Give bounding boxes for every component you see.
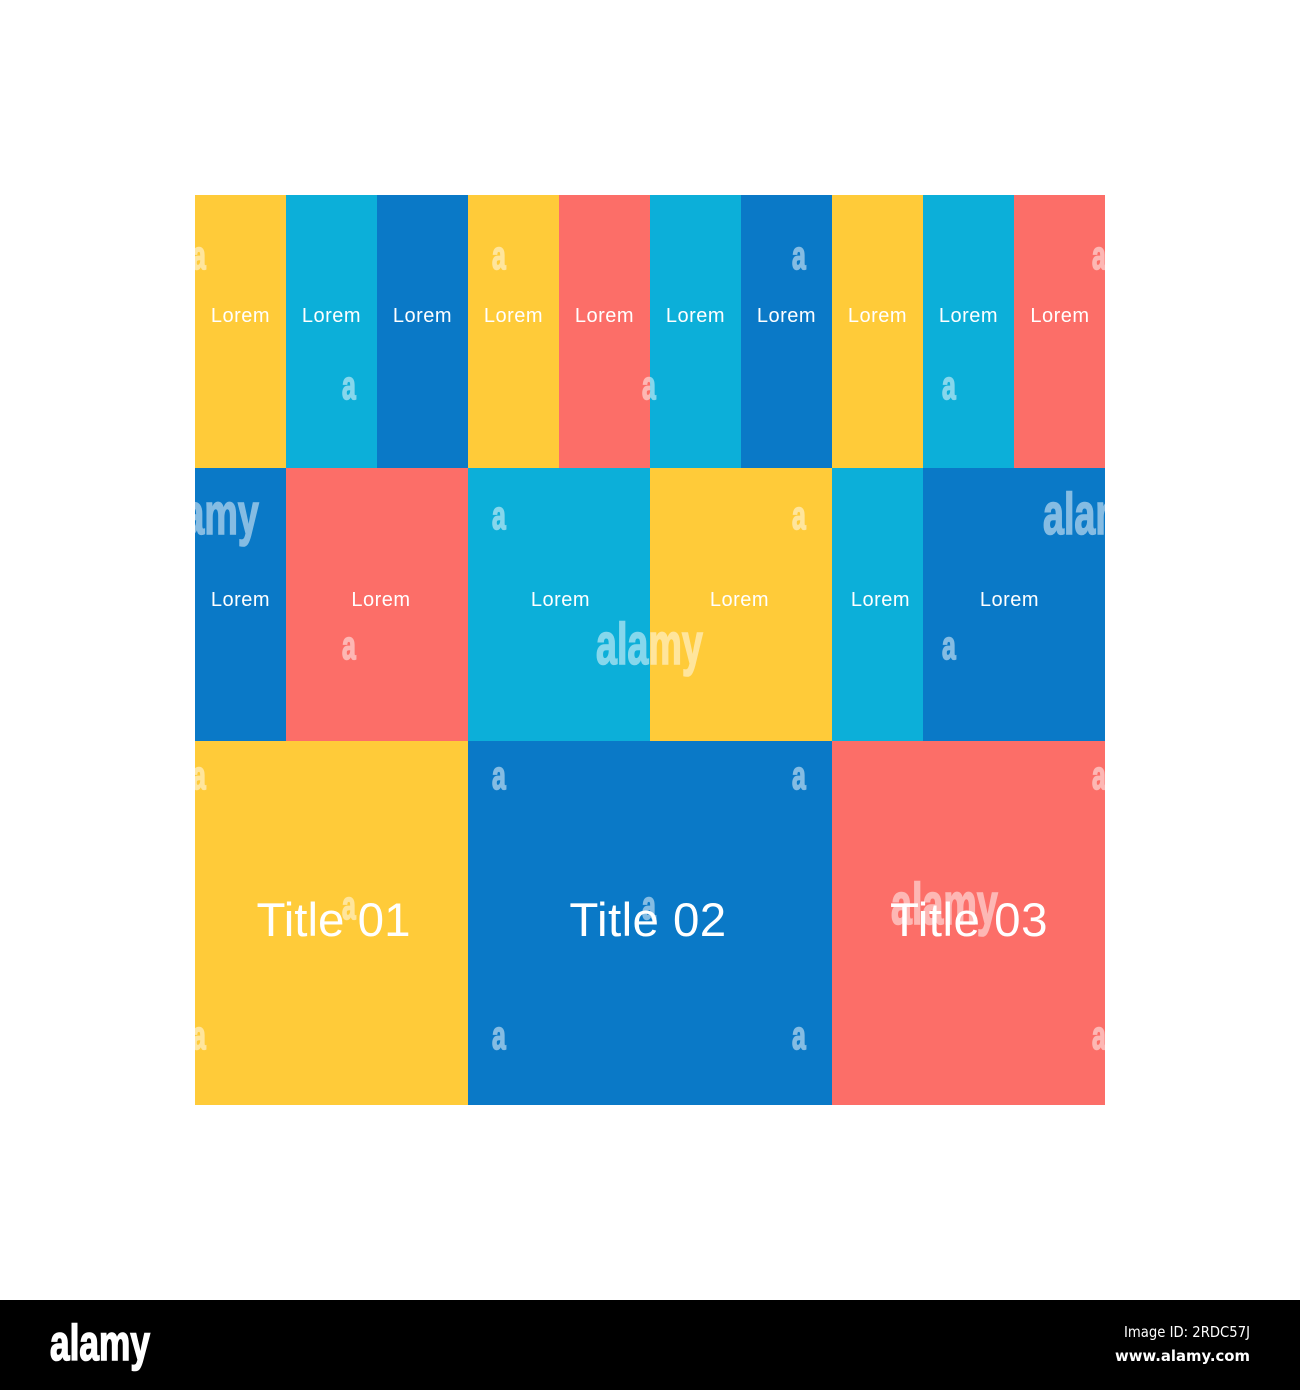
top column 3: Lorem (393, 305, 452, 327)
middle block 2: Lorem (351, 589, 411, 611)
top column 6: Lorem (666, 305, 725, 327)
middle block 6: Lorem (980, 589, 1039, 611)
watermark: repeated stock marks: alamy (596, 613, 703, 677)
footer logo: alamy (50, 1316, 150, 1372)
watermark: repeated stock marks: alamy (891, 873, 998, 937)
top column 6 (650, 195, 741, 468)
top column 9 (923, 195, 1014, 468)
middle block 4 (650, 468, 832, 741)
panel: middle row blocks (195, 468, 1105, 741)
title block 01: Title 01 (256, 894, 410, 947)
footer text and logo (50, 1316, 1250, 1372)
top column 10 (1014, 195, 1105, 468)
watermark: repeated stock marks: a (792, 754, 806, 799)
website: www.alamy.com (1115, 1347, 1250, 1365)
top column 4: Lorem (484, 305, 543, 327)
middle block 5 (832, 468, 923, 741)
middle block 1: Lorem (211, 589, 270, 611)
watermark: repeated stock marks: a (492, 234, 506, 279)
top column 2 (286, 195, 377, 468)
middle block 4: Lorem (710, 589, 769, 611)
middle block 1 (195, 468, 286, 741)
panel: title blocks (195, 741, 1105, 1105)
watermark: repeated stock marks: a (792, 234, 806, 279)
title block 02: Title 02 (569, 894, 727, 947)
top column 9: Lorem (939, 305, 998, 327)
top column 8 (832, 195, 923, 468)
middle block 3 (468, 468, 650, 741)
watermark: repeated stock marks: a (342, 624, 356, 669)
top column 7: Lorem (757, 305, 816, 327)
footer bar (0, 1300, 1300, 1390)
middle block 6 (923, 468, 1105, 741)
watermark: repeated stock marks: a (792, 494, 806, 539)
title block 02 (468, 741, 832, 1105)
watermark: repeated stock marks: a (642, 364, 656, 409)
middle block 3: Lorem (531, 589, 590, 611)
top column 5: Lorem (575, 305, 634, 327)
middle block 2 (286, 468, 468, 741)
title block 01 (195, 741, 468, 1105)
watermark: repeated stock marks: a (342, 364, 356, 409)
top column 3 (377, 195, 468, 468)
top column 10: Lorem (1030, 305, 1090, 327)
watermark: repeated stock marks: a (492, 494, 506, 539)
top column 4 (468, 195, 559, 468)
title block 03: Title 03 (890, 894, 1048, 947)
title block 03 (832, 741, 1105, 1105)
watermark: repeated stock marks: a (342, 884, 356, 929)
watermark: repeated stock marks: a (942, 364, 956, 409)
panel: top row columns (195, 195, 1105, 468)
top column 1: Lorem (211, 305, 270, 327)
watermark: repeated stock marks: a (492, 1014, 506, 1059)
image id: Image ID: 2RDC57J (1124, 1323, 1250, 1341)
top column 1 (195, 195, 286, 468)
watermark: repeated stock marks: a (942, 624, 956, 669)
top column 8: Lorem (848, 305, 907, 327)
top column 5 (559, 195, 650, 468)
watermark: repeated stock marks: a (642, 884, 656, 929)
top column 2: Lorem (302, 305, 361, 327)
watermark: repeated stock marks (195, 234, 1105, 1059)
watermark: repeated stock marks: a (492, 754, 506, 799)
watermark: repeated stock marks: a (792, 1014, 806, 1059)
middle block 5: Lorem (851, 589, 910, 611)
top column 7 (741, 195, 832, 468)
